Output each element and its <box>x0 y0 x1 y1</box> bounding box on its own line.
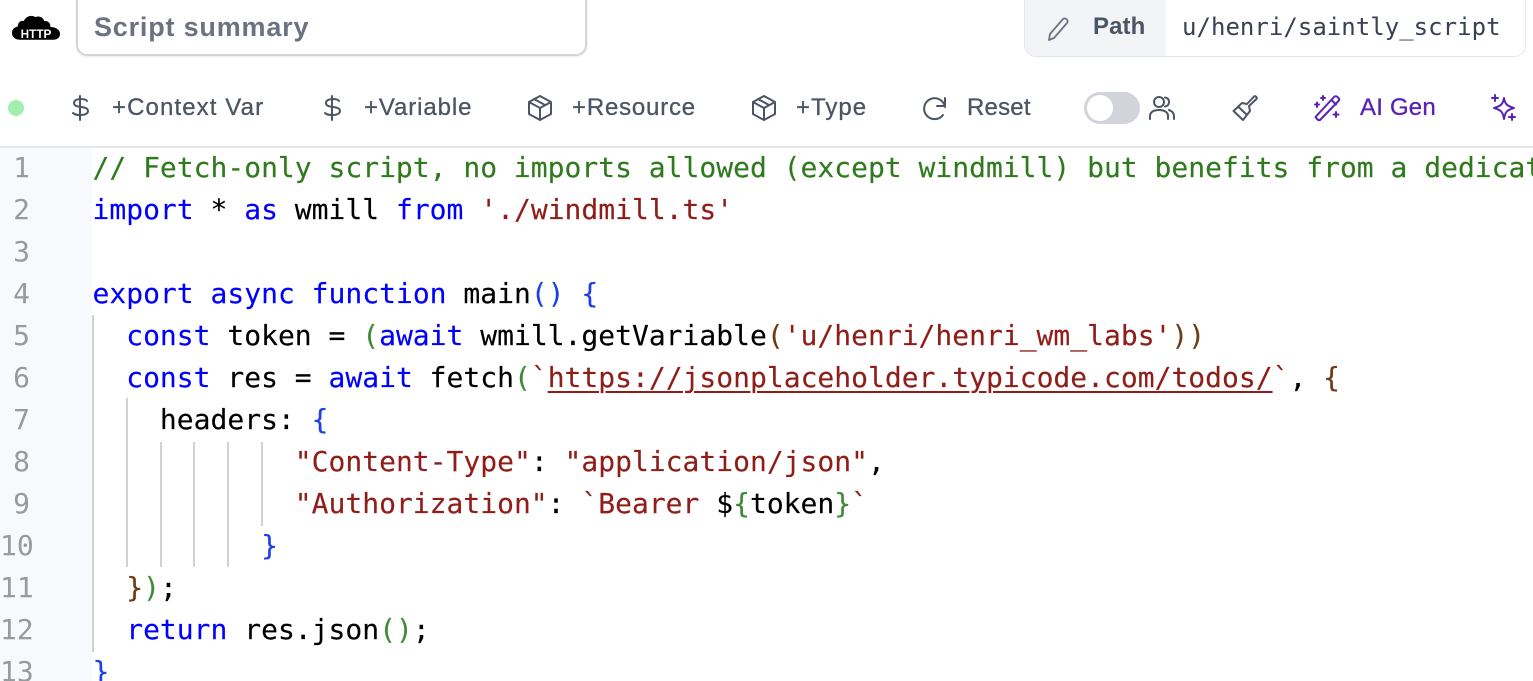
line numbers: 1 <box>13 151 30 184</box>
line numbers: 11 <box>0 571 34 604</box>
line numbers: 8 <box>13 445 30 478</box>
reset button: Reset <box>967 94 1031 121</box>
icon: reset <box>923 97 946 120</box>
icon: dollar <box>72 95 89 121</box>
path value: u/henri/saintly_script <box>1182 13 1501 41</box>
line numbers: 10 <box>0 529 34 562</box>
code editor: const res = await fetch(`https://jsonplaceholder.typicode.com/todos/`, { <box>126 361 1340 394</box>
path label: Path <box>1093 13 1145 40</box>
code editor: } <box>261 529 278 562</box>
code editor: export async function main() { <box>92 277 598 310</box>
code editor: headers: { <box>160 403 329 436</box>
path label background <box>1025 0 1166 56</box>
icon: paintbrush <box>1232 95 1258 121</box>
icon: HTTP cloud logo: HTTP <box>21 28 51 41</box>
line numbers: 6 <box>13 361 30 394</box>
icon: dollar <box>324 95 341 121</box>
icon: users <box>1149 96 1175 120</box>
code editor: "Authorization": `Bearer ${token}` <box>295 487 868 520</box>
line numbers: 12 <box>0 613 34 646</box>
icon: sparkles <box>1491 94 1516 121</box>
line number gutter <box>0 148 92 681</box>
toggle knob <box>1087 95 1113 121</box>
toggle switch <box>1084 92 1140 124</box>
line numbers: 2 <box>13 193 30 226</box>
code editor <box>92 151 1533 681</box>
resource button: +Resource <box>572 94 696 121</box>
line numbers: 3 <box>13 235 30 268</box>
icon: magic wand <box>1314 95 1340 122</box>
context var button: +Context Var <box>112 94 264 121</box>
line numbers: 5 <box>13 319 30 352</box>
line numbers: 4 <box>13 277 30 310</box>
AI Gen button: AI Gen <box>1360 94 1436 121</box>
line numbers: 9 <box>13 487 30 520</box>
variable button: +Variable <box>364 94 472 121</box>
path field <box>1024 0 1526 57</box>
code editor: import * as wmill from './windmill.ts' <box>92 193 733 226</box>
code editor: }); <box>126 571 177 604</box>
input placeholder text: Script summary <box>94 12 309 42</box>
toolbar <box>8 92 1516 124</box>
line numbers <box>0 151 34 681</box>
status dot <box>8 100 24 116</box>
icon: package <box>752 95 776 121</box>
code editor: "Content-Type": "application/json", <box>295 445 885 478</box>
type button: +Type <box>796 94 867 121</box>
code editor: return res.json(); <box>126 613 430 646</box>
icon: HTTP cloud logo <box>12 16 60 41</box>
code editor: const token = (await wmill.getVariable('u/henri/henri_wm_labs')) <box>126 319 1205 352</box>
toolbar divider <box>0 146 1533 148</box>
line numbers: 7 <box>13 403 30 436</box>
icon: pencil <box>1048 18 1069 41</box>
icon: package <box>528 95 552 121</box>
input: script summary <box>76 0 587 56</box>
